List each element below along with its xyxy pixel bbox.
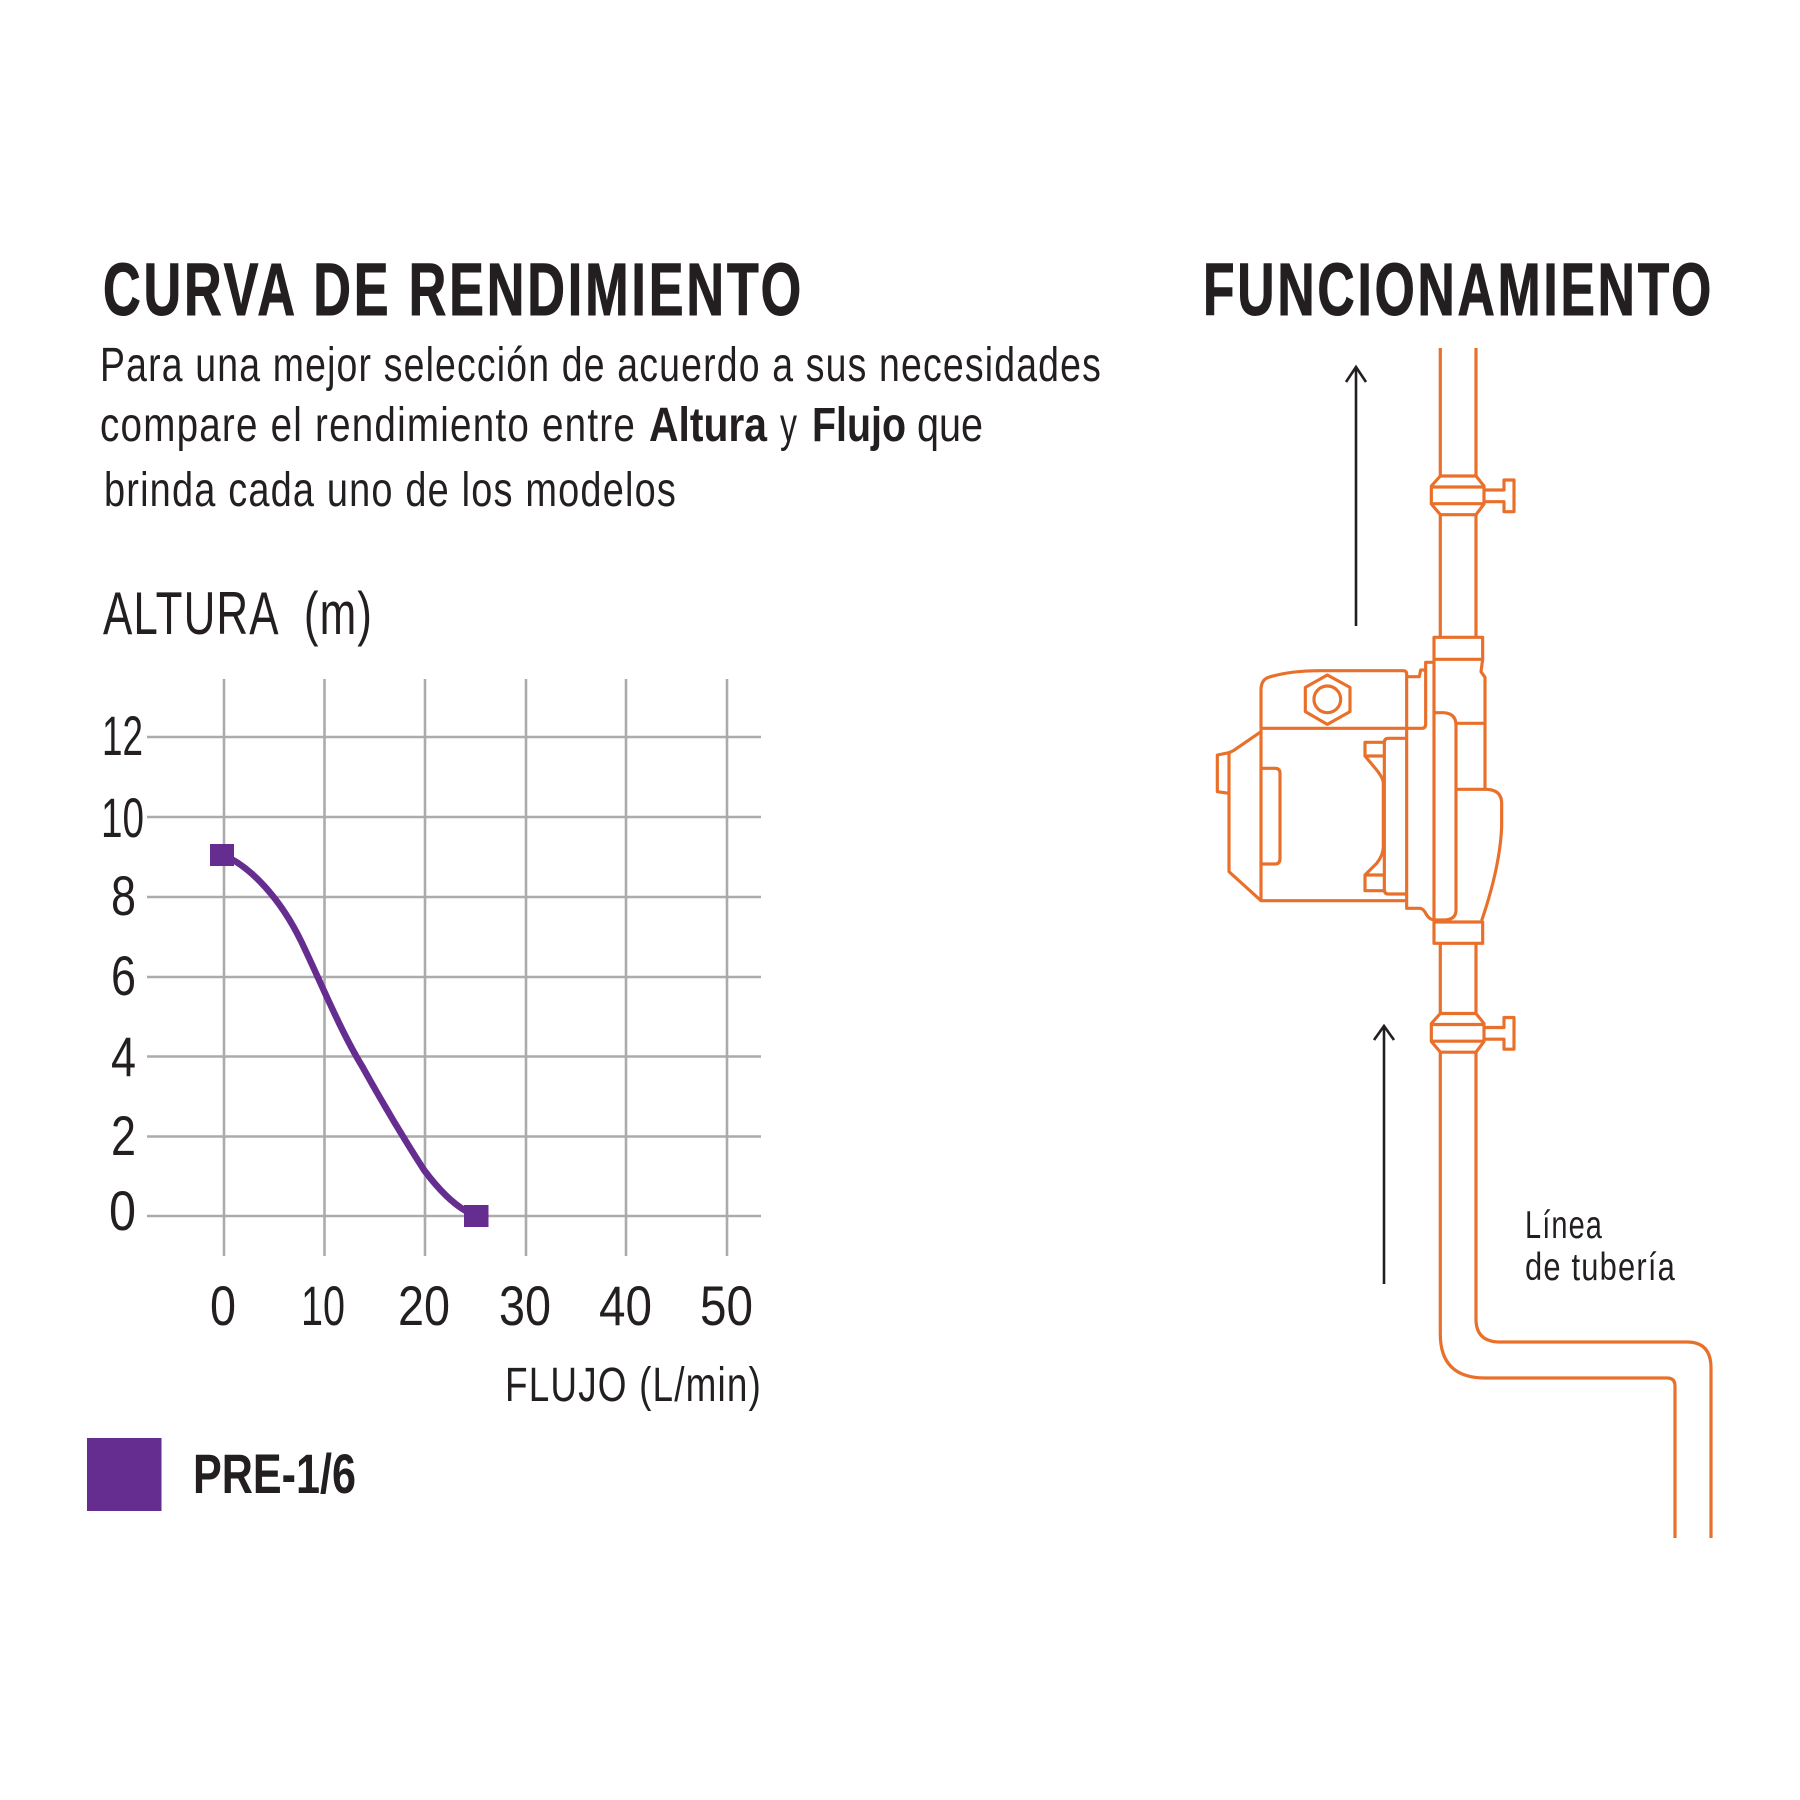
curve end marker — [464, 1205, 488, 1227]
icon: water pump — [1217, 637, 1502, 943]
intro text block: que — [917, 399, 983, 452]
intro text block: Para una mejor selección de acuerdo a sus necesidades — [100, 339, 1102, 392]
y axis numbers: 0 — [109, 1179, 136, 1242]
icon: upper valve — [1431, 476, 1514, 515]
intro text block — [100, 339, 1102, 517]
intro text block: compare el rendimiento entre — [100, 399, 636, 452]
pipe line label: Línea — [1525, 1204, 1603, 1247]
legend — [87, 1438, 356, 1511]
x axis title: FLUJO (L/min) — [505, 1359, 762, 1412]
middle pipe — [1440, 943, 1476, 1014]
intro text block: Altura — [649, 399, 767, 452]
intro text block: brinda cada uno de los modelos — [104, 464, 677, 517]
lower pipe with bends — [1440, 1051, 1711, 1538]
intro text block: Flujo — [812, 399, 906, 452]
arrow: upper flow direction — [1346, 367, 1366, 626]
y axis numbers: 4 — [111, 1025, 136, 1088]
y axis numbers: 12 — [102, 704, 143, 767]
performance line chart — [101, 679, 761, 1337]
y axis title: ALTURA (m) — [103, 580, 373, 647]
y axis numbers — [101, 704, 144, 1242]
icon: lower valve — [1431, 1013, 1514, 1052]
x axis numbers: 10 — [301, 1274, 345, 1337]
arrow: lower flow direction — [1374, 1026, 1394, 1284]
heading: curva de rendimiento: CURVA DE RENDIMIENTO — [103, 248, 804, 331]
y axis numbers: 10 — [101, 786, 144, 849]
x axis numbers — [210, 1274, 753, 1337]
y axis numbers: 2 — [111, 1104, 136, 1167]
upper pipe — [1440, 348, 1476, 637]
x axis numbers: 40 — [599, 1274, 652, 1337]
legend label: PRE-1/6 — [193, 1442, 356, 1505]
legend swatch — [87, 1438, 162, 1511]
intro text block: y — [780, 399, 797, 452]
pipe line label: de tubería — [1525, 1246, 1676, 1289]
curve start marker — [210, 844, 234, 866]
x axis numbers: 50 — [700, 1274, 753, 1337]
y axis numbers: 8 — [111, 864, 136, 927]
y axis numbers: 6 — [111, 944, 136, 1007]
x axis numbers: 0 — [210, 1274, 236, 1337]
chart grid — [147, 679, 761, 1256]
pipe line diagram — [1440, 348, 1711, 1538]
x axis numbers: 30 — [499, 1274, 551, 1337]
x axis numbers: 20 — [398, 1274, 450, 1337]
performance curve — [223, 855, 466, 1211]
pipe line label — [1525, 1204, 1676, 1289]
